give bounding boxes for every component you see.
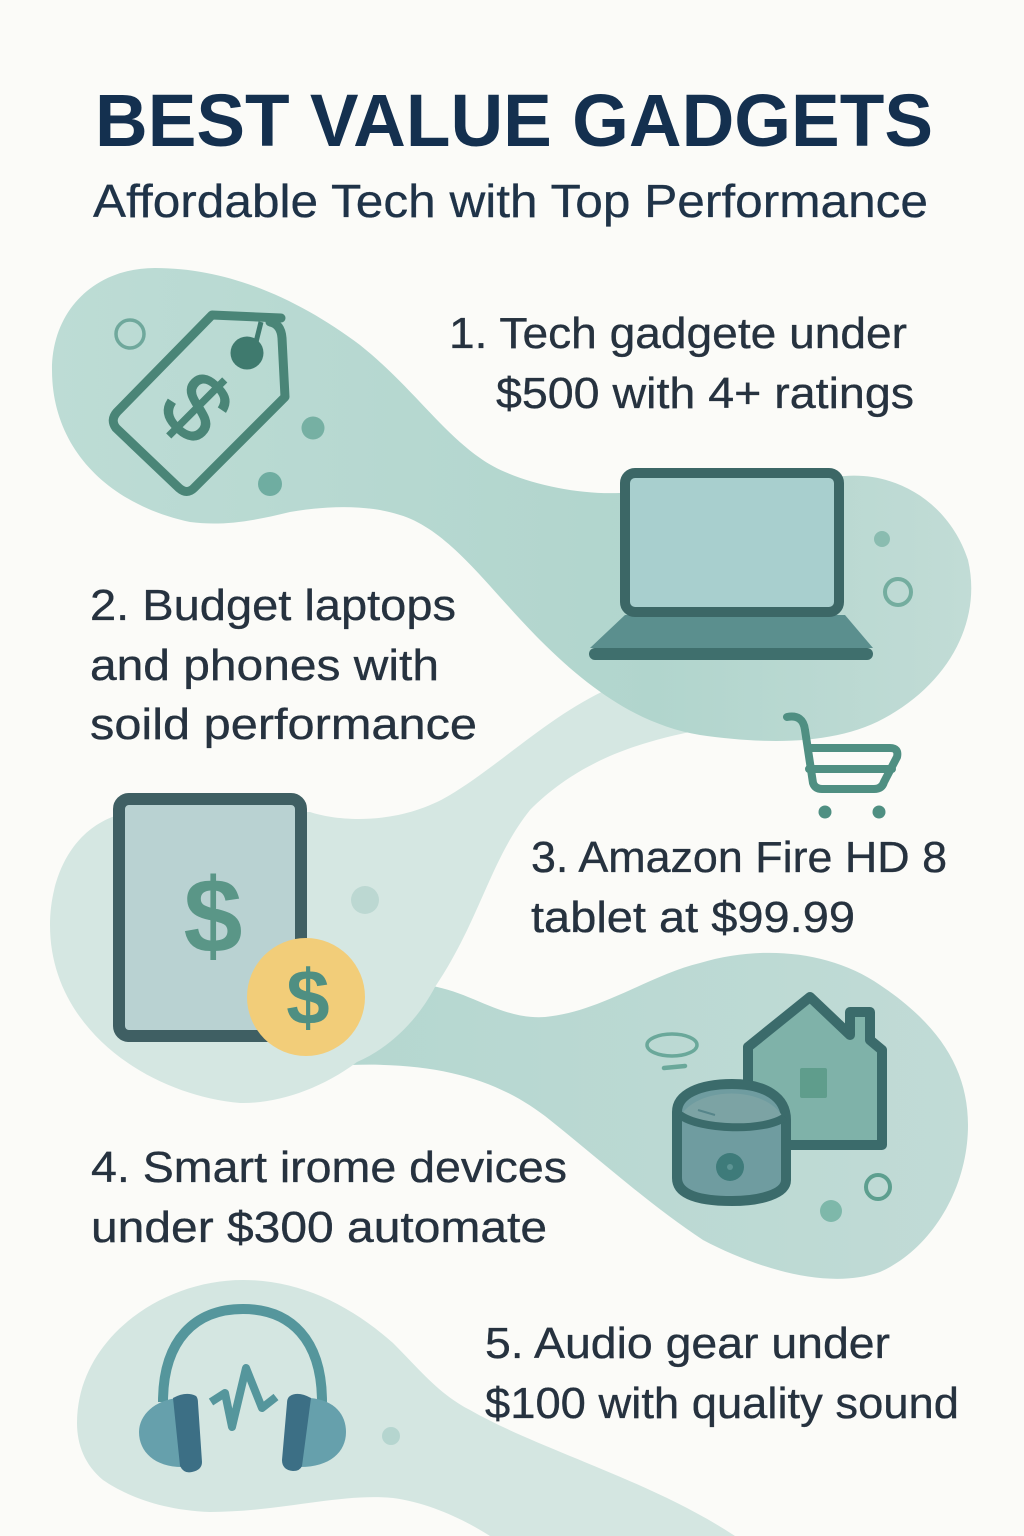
item 2 text <box>90 581 477 749</box>
item 4 text <box>91 1143 567 1252</box>
decoration: headphones panel dot <box>382 1427 400 1445</box>
item 3 text <box>531 833 947 942</box>
subtitle: Affordable Tech with Top Performance <box>93 175 928 227</box>
item 3 text: tablet at $99.99 <box>531 893 855 942</box>
item 2 text: soild performance <box>90 700 477 749</box>
decoration: laptop panel dots <box>874 531 911 605</box>
icon: tablet with dollar: $ <box>184 857 242 975</box>
decoration: tag panel dots <box>116 320 324 496</box>
title: BEST VALUE GADGETS <box>95 79 933 162</box>
icon: smart speaker <box>677 1084 786 1201</box>
blob: tablet panel <box>50 688 700 1103</box>
item 2 text: 2. Budget laptops <box>90 581 456 630</box>
item 5 text: 5. Audio gear under <box>485 1319 890 1368</box>
item 4 text: 4. Smart irome devices <box>91 1143 567 1192</box>
icon: tablet with dollar <box>119 799 301 1036</box>
icon: price tag <box>113 315 285 492</box>
item 1 text <box>449 309 914 418</box>
item 1 text: $500 with 4+ ratings <box>496 369 914 418</box>
icon: headphones <box>139 1309 346 1472</box>
item 1 text: 1. Tech gadgete under <box>449 309 907 358</box>
icon: wireless signal <box>647 1034 697 1068</box>
blob: headphones panel <box>77 1280 735 1536</box>
decoration: tablet panel dot <box>351 886 379 914</box>
item 3 text: 3. Amazon Fire HD 8 <box>531 833 947 882</box>
decoration: smart home panel dots <box>820 1175 890 1222</box>
blob: price tag and laptop panel <box>52 268 971 741</box>
item 2 text: and phones with <box>90 641 439 690</box>
icon: coin: $ <box>286 953 330 1041</box>
icon: laptop <box>589 473 873 660</box>
icon: house <box>748 997 882 1145</box>
blob: smart home panel <box>350 953 968 1279</box>
item 5 text <box>485 1319 959 1428</box>
item 4 text: under $300 automate <box>91 1203 547 1252</box>
icon: price tag: $ <box>140 351 253 464</box>
icon: coin <box>247 938 365 1056</box>
item 5 text: $100 with quality sound <box>485 1379 959 1428</box>
icon: shopping cart <box>787 717 897 818</box>
